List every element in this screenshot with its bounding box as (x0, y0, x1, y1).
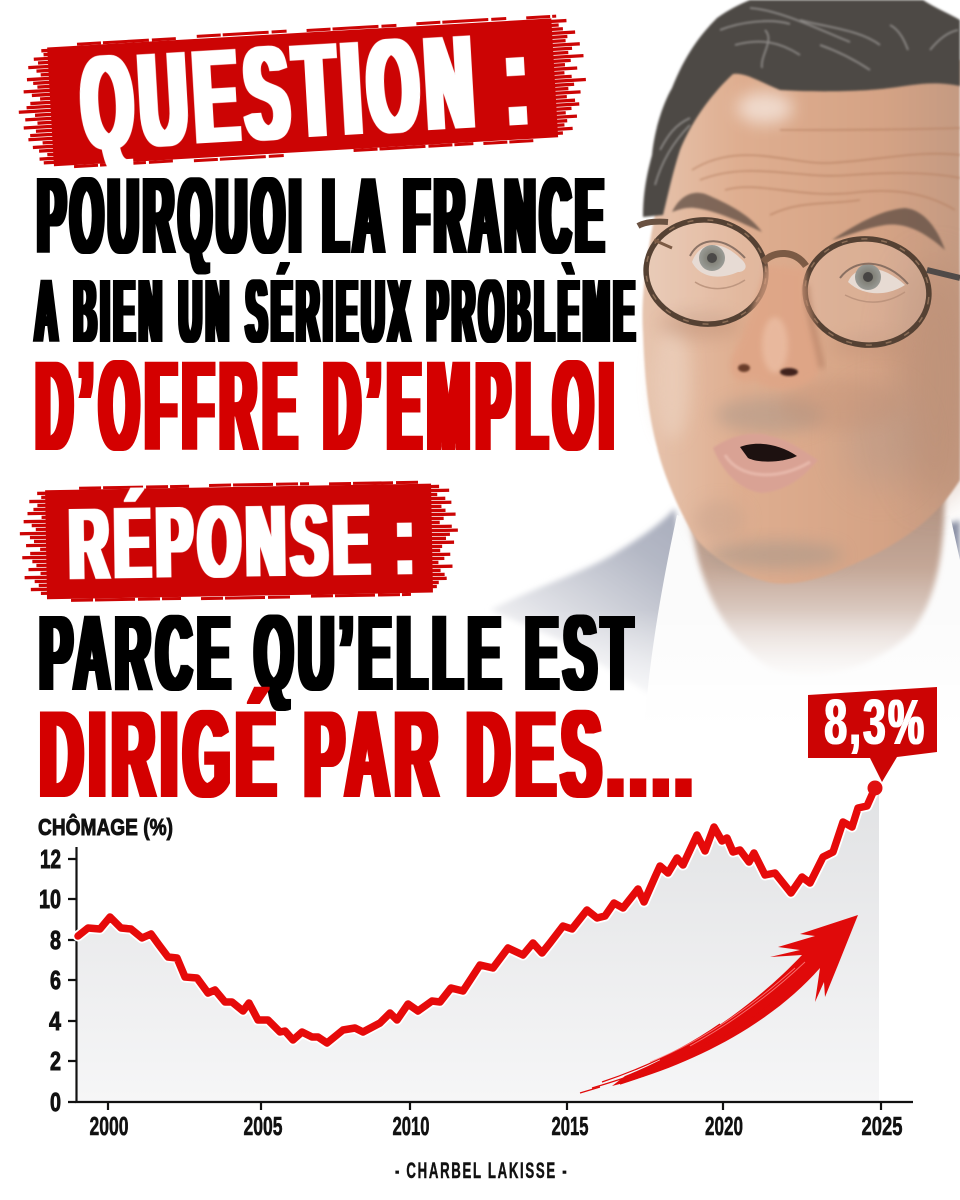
x axis labels: 2010 (392, 1111, 430, 1141)
fade of photo into white (480, 610, 960, 730)
icon: brush arrow (580, 915, 858, 1093)
y axis labels: 8 (50, 925, 61, 955)
y axis labels: 2 (50, 1046, 61, 1076)
y axis labels: 6 (50, 965, 61, 995)
y axis labels: 12 (40, 844, 61, 874)
end point (868, 780, 882, 796)
x axis labels: 2005 (244, 1111, 282, 1141)
y axis labels: 10 (39, 884, 61, 914)
shirt collar (645, 515, 960, 720)
y axis labels: 4 (49, 1006, 61, 1036)
x axis labels (90, 1111, 902, 1141)
brush stroke (19, 481, 459, 602)
brush stroke (15, 14, 589, 171)
eyes (690, 241, 908, 302)
banner: RÉPONSE (19, 481, 459, 602)
mouth (713, 434, 818, 493)
forehead wrinkles (692, 128, 960, 215)
x axis labels: 2015 (552, 1111, 588, 1141)
hair grey strands (655, 8, 958, 185)
glasses (638, 214, 960, 351)
hair (643, 0, 960, 217)
area under the line (78, 788, 879, 1102)
x axis labels: 2025 (862, 1111, 902, 1141)
x axis labels: 2000 (90, 1111, 128, 1141)
jacket (490, 508, 960, 700)
chart: unemployment in France (38, 686, 937, 1141)
eyebrows (672, 193, 945, 250)
neck (688, 480, 945, 675)
face (642, 60, 960, 584)
y axis labels: 0 (50, 1087, 61, 1117)
callout: 8,3% (808, 686, 937, 782)
chart title: CHÔMAGE (%) (38, 813, 173, 840)
x axis labels: 2020 (705, 1111, 743, 1141)
y axis labels (39, 844, 61, 1117)
unemployment line (78, 788, 875, 1043)
footer: author credit: - CHARBEL LAKISSE - (395, 1159, 567, 1183)
photo: portrait of a man with glasses (480, 0, 960, 800)
banner: QUESTION (15, 4, 589, 179)
axes (68, 847, 913, 1110)
heading: RÉPONSE: RÉPONSE : (68, 482, 420, 601)
nose (731, 265, 822, 389)
face shading (654, 92, 960, 569)
